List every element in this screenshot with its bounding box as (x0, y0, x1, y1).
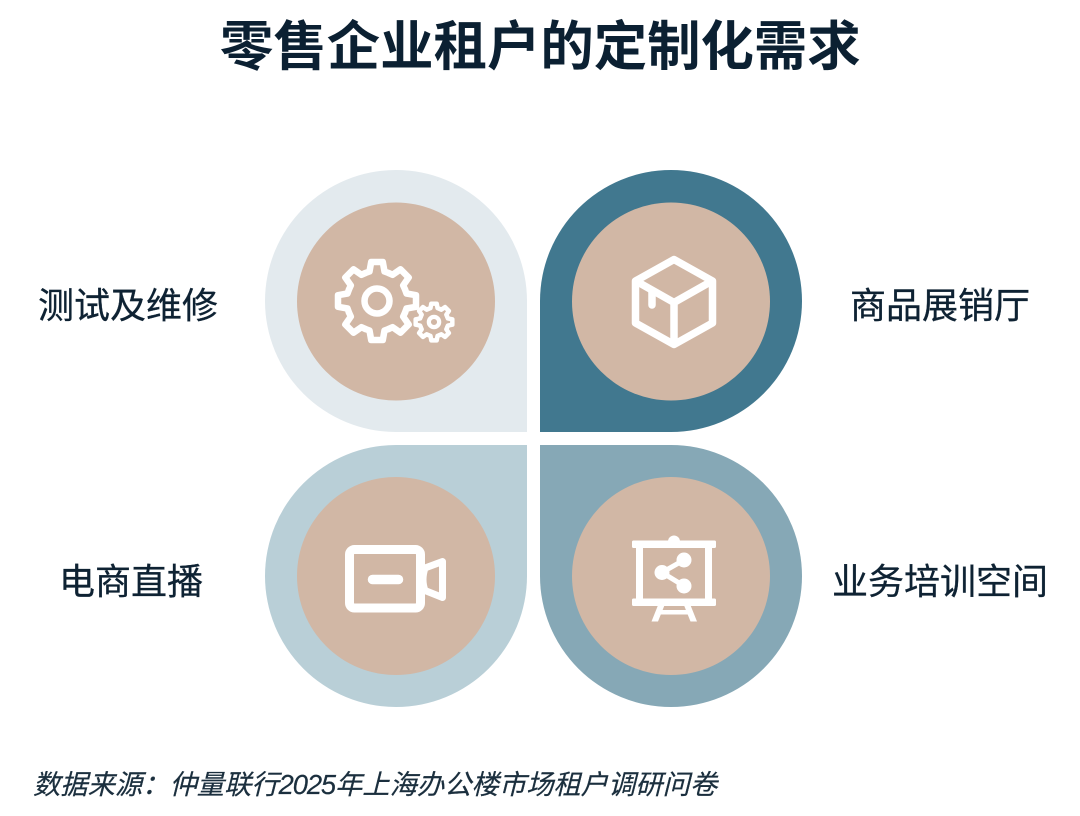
label: e-commerce livestream: 电商直播 (59, 561, 203, 602)
icon: video camera (350, 550, 442, 608)
label: business training space: 业务培训空间 (832, 561, 1048, 602)
icon: gears (338, 262, 452, 340)
label: testing and repair: 测试及维修 (38, 285, 218, 326)
source note: 数据来源：仲量联行2025年上海办公楼市场租户调研问卷 (33, 769, 717, 800)
icon: box (636, 260, 712, 344)
petal: testing and repair (265, 170, 527, 432)
title: 零售企业租户的定制化需求 (220, 18, 861, 76)
icon: presentation board (632, 536, 716, 622)
petal: e-commerce livestream (265, 445, 527, 707)
petal: product showroom (540, 170, 802, 432)
petal: business training space (540, 445, 802, 707)
label: product showroom: 商品展销厅 (850, 285, 1030, 326)
